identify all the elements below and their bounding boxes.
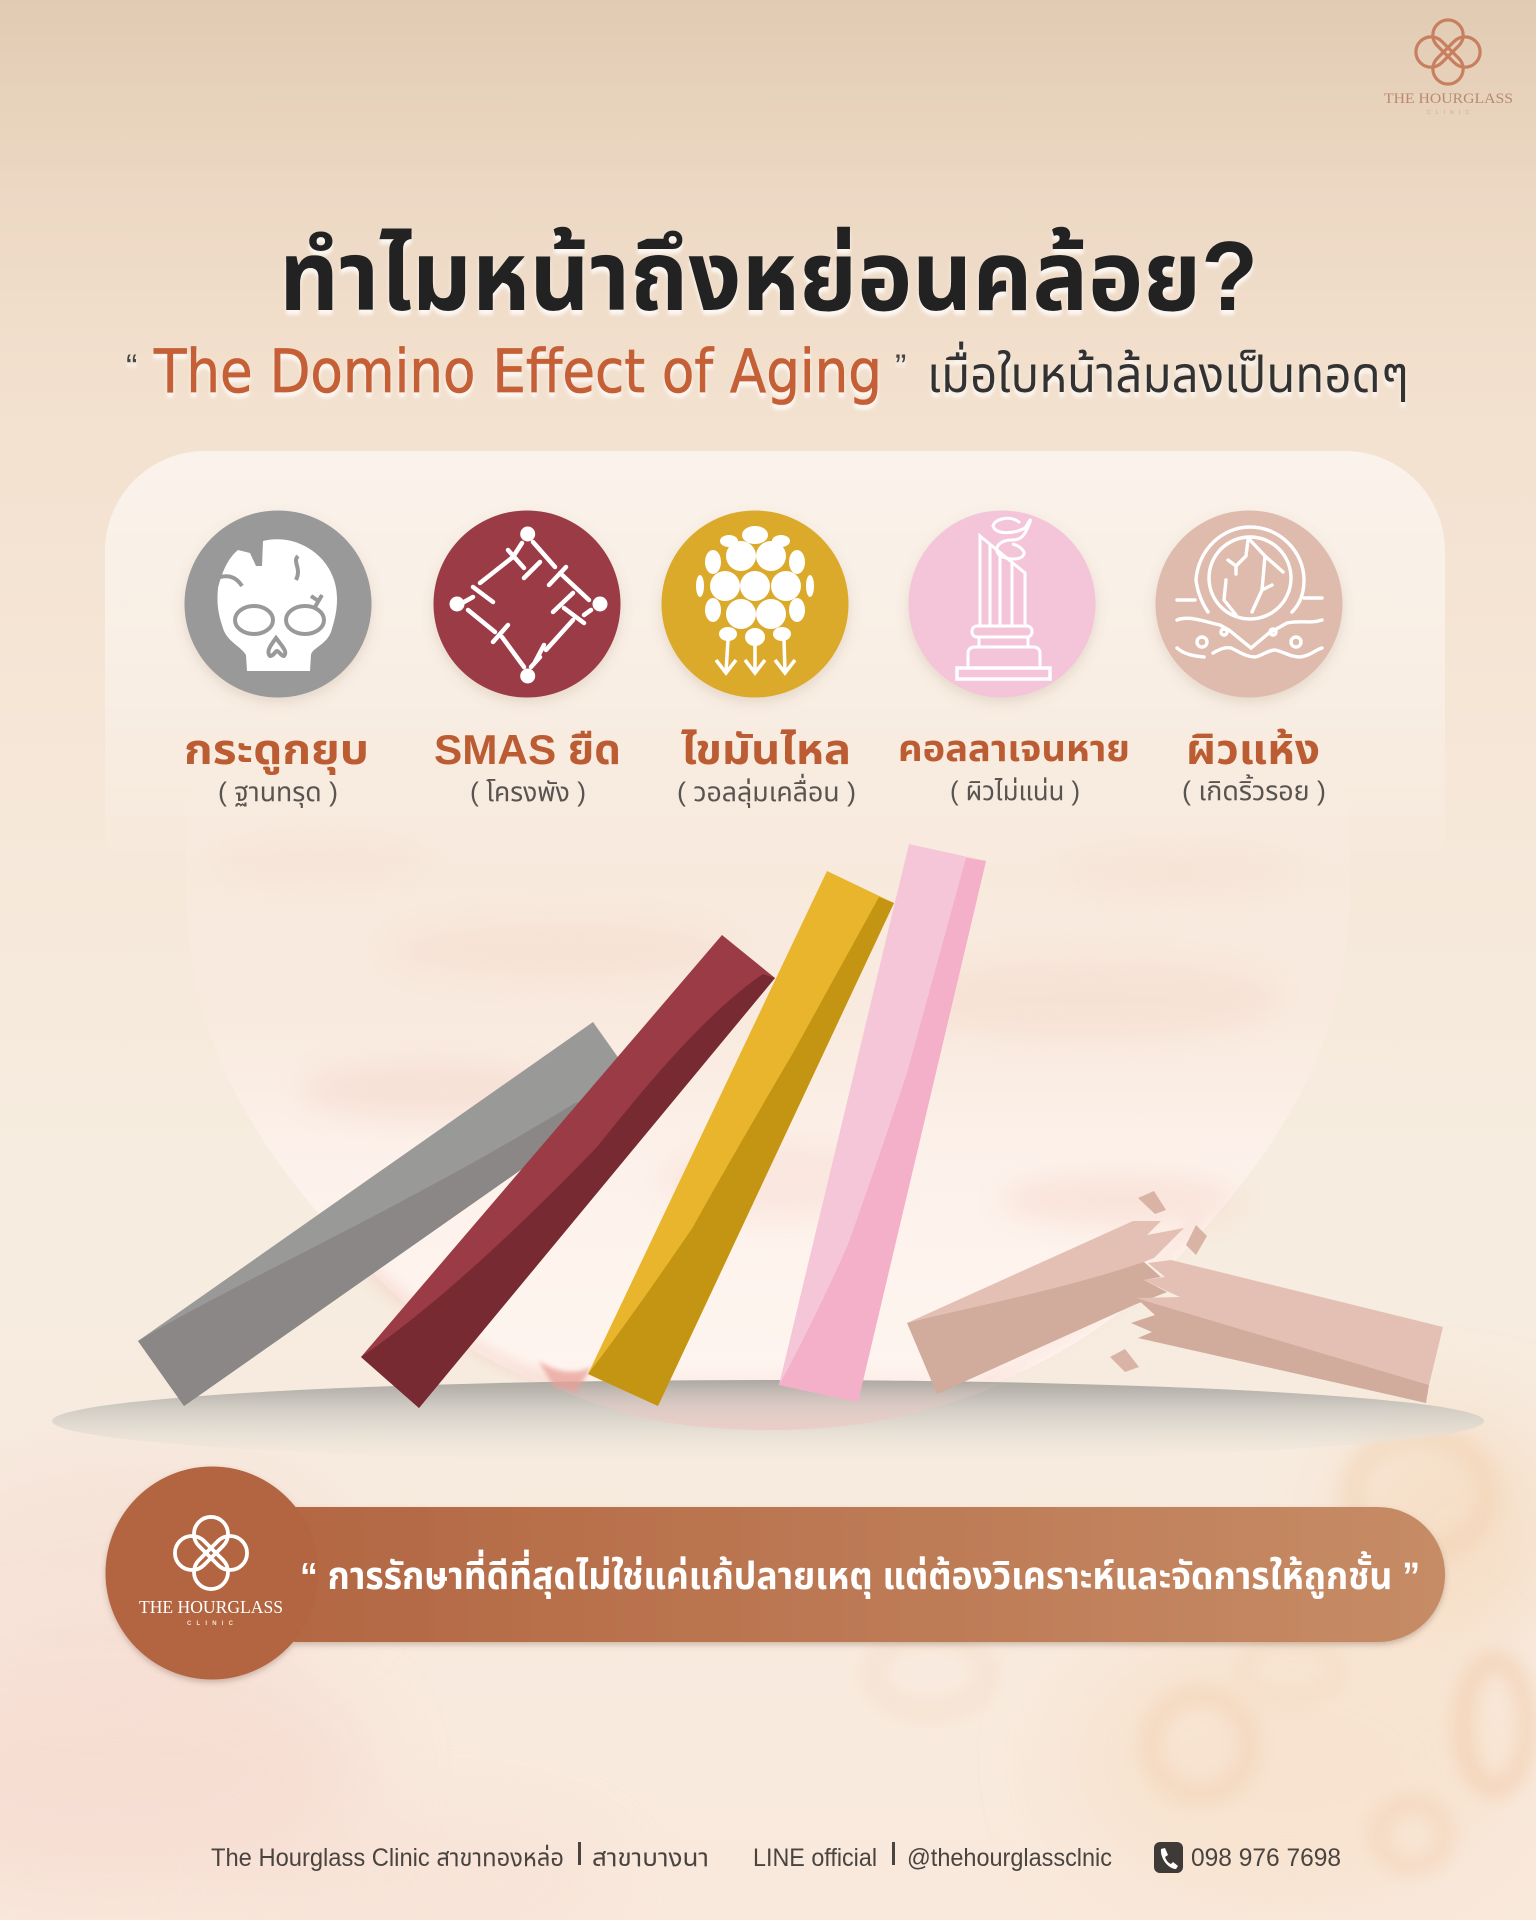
background skin cell texture: [0, 1410, 1536, 1920]
subtitle: [126, 337, 1409, 407]
footer: สาขาบางนา: [592, 1844, 709, 1872]
banner logo: THE HOURGLASS: [139, 1597, 283, 1617]
bowl-shaped skin background: [186, 760, 1350, 1428]
label: bone: [184, 726, 369, 808]
label: fat: ( วอลลุ่มเคลื่อน ): [677, 773, 856, 808]
label: collagen: คอลลาเจนหาย: [898, 728, 1130, 769]
logo: top right: [1384, 20, 1513, 116]
label: dry skin: ผิวแห้ง: [1186, 726, 1320, 773]
label: dry skin: [1182, 726, 1326, 806]
panel: rounded frosted card: [105, 451, 1445, 1000]
label: collagen: ( ผิวไม่แน่น ): [950, 776, 1080, 806]
domino: yellow bar: [588, 871, 894, 1406]
banner logo: CLINIC: [187, 1621, 235, 1627]
footer: [211, 1842, 1341, 1873]
footer: @thehourglassclnic: [907, 1844, 1112, 1872]
domino: broken beige bar: [907, 1191, 1443, 1403]
banner quote: “ การรักษาที่ดีที่สุดไม่ใช่แค่แก้ปลายเหตุ แต่ต้องวิเคราะห์และจัดการให้ถูกชั้น ”: [300, 1549, 1420, 1599]
label: bone: กระดูกยุบ: [184, 726, 369, 775]
label: SMAS: [434, 726, 621, 807]
subtitle: ”: [895, 348, 906, 386]
subtitle: เมื่อใบหน้าล้มลงเป็นทอดๆ: [927, 341, 1409, 403]
label: SMAS: SMAS ยืด: [434, 726, 621, 773]
banner: bar: [106, 1466, 1445, 1680]
logo: top right: CLINIC: [1427, 110, 1471, 116]
domino: pink bar: [779, 844, 986, 1402]
logo: top right: THE HOURGLASS: [1384, 91, 1513, 107]
icon: dry skin cracked circle: [1156, 510, 1342, 698]
label: collagen: [898, 728, 1130, 806]
label: dry skin: ( เกิดริ้วรอย ): [1182, 774, 1326, 806]
red tip: [538, 1360, 592, 1393]
label: bone: ( ฐานทรุด ): [218, 777, 338, 808]
footer: LINE official: [753, 1844, 877, 1872]
floor ellipse shadow: [52, 1380, 1484, 1462]
label: fat: [677, 726, 856, 808]
icon: fat cells falling circle: [662, 510, 848, 698]
subtitle: The Domino Effect of Aging: [153, 337, 882, 407]
domino: red bar: [361, 935, 775, 1408]
banner logo: [139, 1517, 283, 1627]
icon: phone: [1154, 1842, 1183, 1873]
icon: SMAS ligament circle: [434, 510, 620, 698]
icon: skull circle, bone collapse: [184, 510, 372, 698]
title: ทำไมหน้าถึงหย่อนคล้อย?: [279, 221, 1258, 331]
footer: The Hourglass Clinic สาขาทองหล่อ: [211, 1844, 564, 1872]
bowl tip over floor: [540, 1380, 1010, 1430]
footer: 098 976 7698: [1191, 1844, 1341, 1872]
icon: broken column circle: [908, 510, 1096, 698]
label: SMAS: ( โครงพัง ): [470, 777, 586, 807]
domino: gray bar: [138, 1022, 639, 1406]
label: fat: ไขมันไหล: [681, 726, 851, 773]
subtitle: “: [126, 348, 137, 386]
